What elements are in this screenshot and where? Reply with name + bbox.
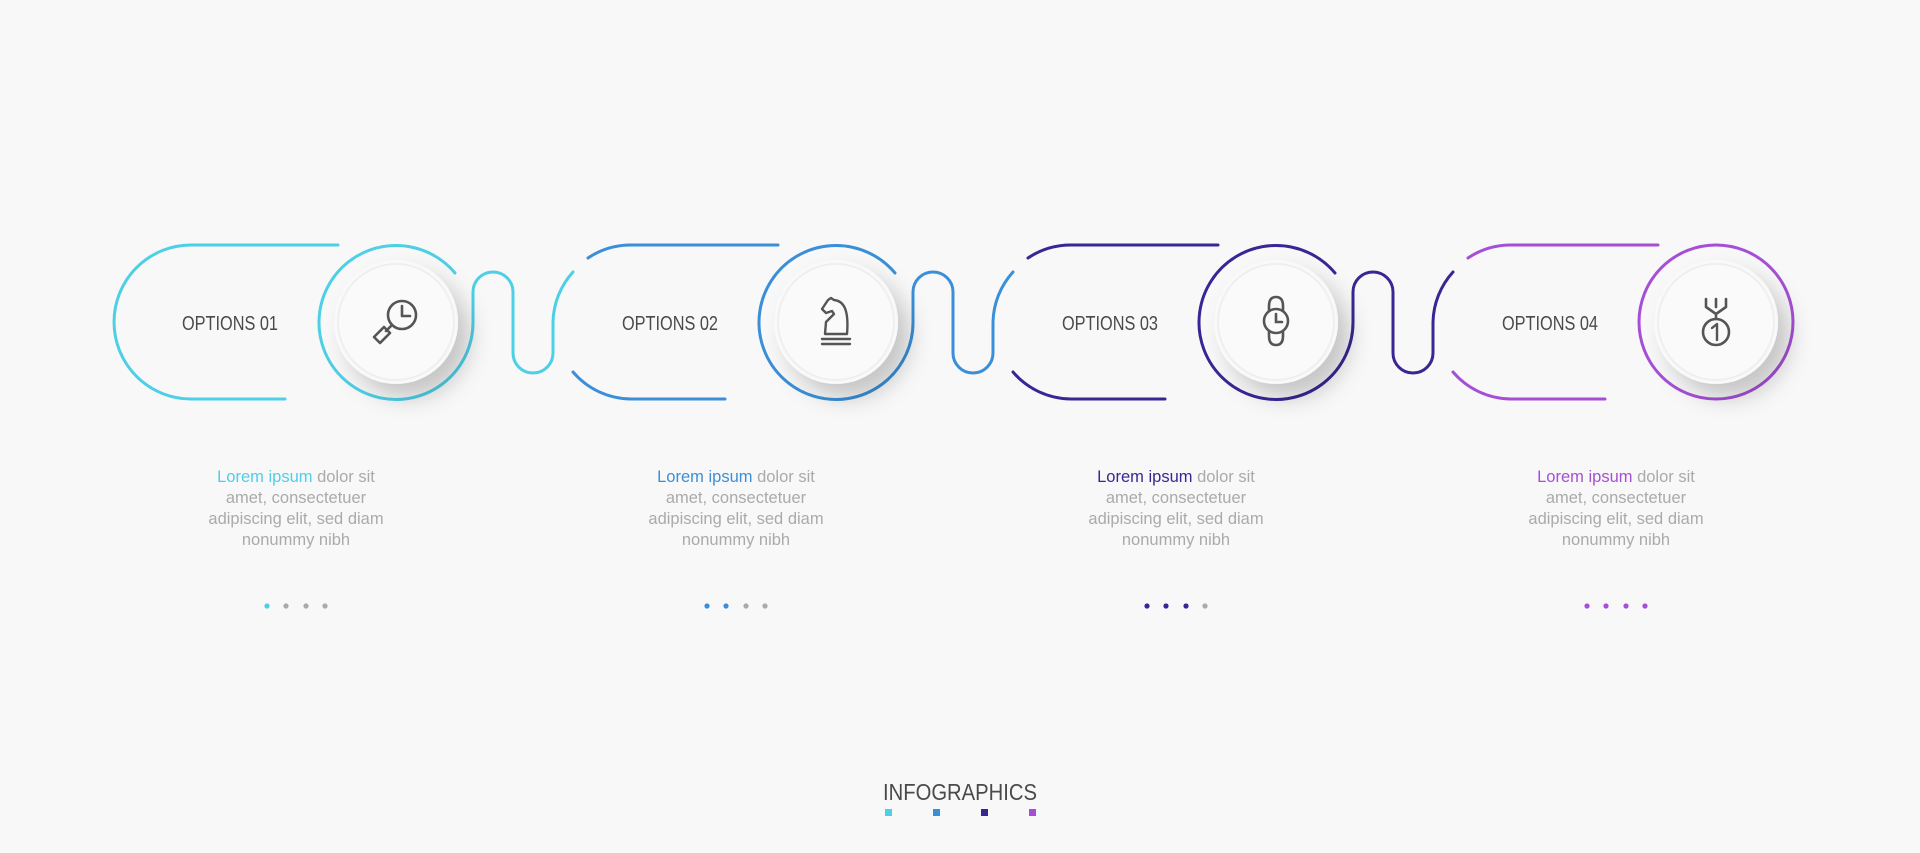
dots 02: [704, 603, 768, 609]
button 02: [774, 260, 898, 384]
icon: watch: [1264, 297, 1288, 345]
panel: options 02: [573, 245, 1013, 609]
dots 04: [1584, 603, 1648, 609]
pill outline 04: [1453, 245, 1658, 399]
ring and wave connector 01: [319, 245, 573, 399]
text block 02: adipiscing elit, sed diam: [648, 510, 824, 528]
text block 03: amet, consectetuer: [1106, 489, 1247, 507]
panel: options 01: [114, 245, 573, 609]
text block 01: amet, consectetuer: [226, 489, 367, 507]
footer title: INFOGRAPHICS: [883, 779, 1037, 805]
text block 02: nonummy nibh: [682, 531, 790, 549]
icon: medal: [1703, 299, 1729, 345]
text block 01: Lorem ipsum dolor sit: [217, 468, 375, 486]
icon: chess knight: [822, 298, 850, 344]
label: options 02: OPTIONS 02: [622, 313, 718, 335]
text block 01: nonummy nibh: [242, 531, 350, 549]
button 01: [334, 260, 458, 384]
label: options 01: OPTIONS 01: [182, 313, 278, 335]
pill outline 03: [1013, 245, 1218, 399]
text block 02: amet, consectetuer: [666, 489, 807, 507]
panel: options 03: [1013, 245, 1453, 609]
text block 02: Lorem ipsum dolor sit: [657, 468, 815, 486]
legend squares: [885, 809, 1036, 816]
icon: magnifier clock: [374, 301, 416, 343]
ring and wave connector 02: [759, 245, 1013, 399]
text block 04: nonummy nibh: [1562, 531, 1670, 549]
label: options 03: OPTIONS 03: [1062, 313, 1158, 335]
text block 04: adipiscing elit, sed diam: [1528, 510, 1704, 528]
footer title: [883, 779, 1037, 816]
dots 03: [1144, 603, 1208, 609]
dots 01: [264, 603, 328, 609]
text block 03: nonummy nibh: [1122, 531, 1230, 549]
text block 04: amet, consectetuer: [1546, 489, 1687, 507]
pill outline 01: [114, 245, 338, 399]
pill outline 02: [573, 245, 778, 399]
button 04: [1654, 260, 1778, 384]
label: options 04: OPTIONS 04: [1502, 313, 1598, 335]
text block 03: Lorem ipsum dolor sit: [1097, 468, 1255, 486]
button 03: [1214, 260, 1338, 384]
panel: options 04: [1453, 245, 1793, 609]
text block 01: adipiscing elit, sed diam: [208, 510, 384, 528]
text block 03: adipiscing elit, sed diam: [1088, 510, 1264, 528]
ring 04: [1639, 245, 1793, 399]
ring and wave connector 03: [1199, 245, 1453, 399]
text block 04: Lorem ipsum dolor sit: [1537, 468, 1695, 486]
